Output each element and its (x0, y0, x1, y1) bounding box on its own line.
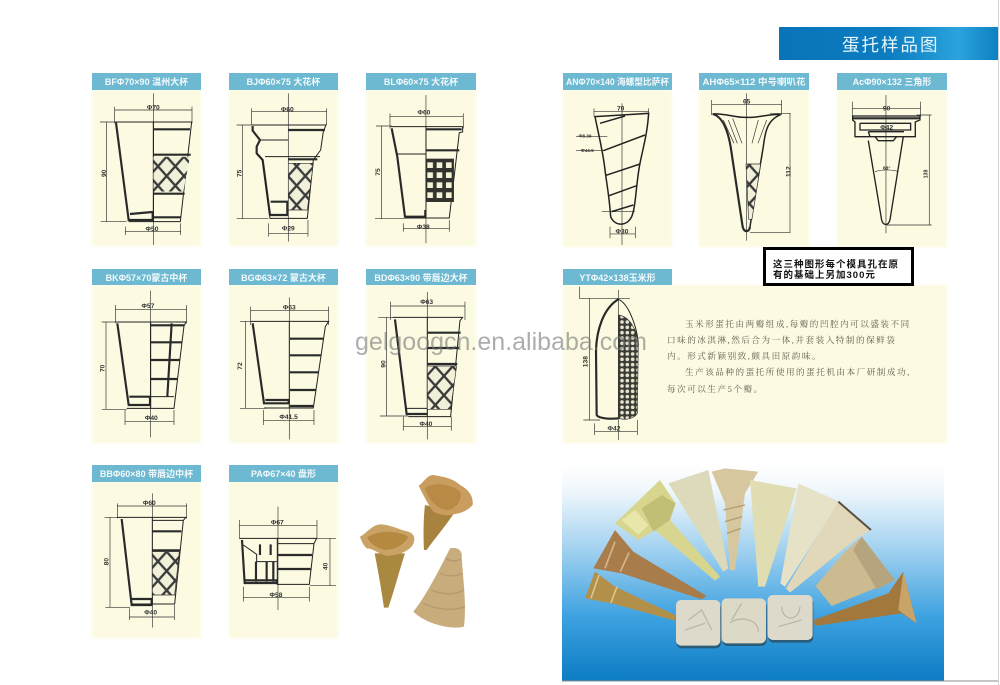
panel: BK: 70 (100, 364, 107, 372)
callout: surcharge note: 这三种图形每个模具孔在原 (773, 258, 899, 270)
panel: PA: 40 (322, 562, 329, 570)
panel: BK: BKΦ57×70蒙古中杯 (106, 272, 187, 283)
panel: PA: Φ67 (271, 519, 284, 526)
panel: Ac: 138 (923, 170, 929, 178)
panel: BL: Φ60 (418, 110, 431, 117)
panel: BB: Φ40 (144, 609, 157, 616)
panel: BK: Φ40 (145, 415, 158, 422)
panel: AH: 112 (786, 166, 793, 177)
panel: BD (366, 269, 476, 443)
diagram: corn-shaped cone (579, 287, 638, 440)
description text: 生产该品种的蛋托所使用的蛋托机由本厂研制成功, (685, 366, 911, 377)
panel: BJ (229, 73, 338, 246)
photo panel: cone samples (562, 465, 998, 682)
right edge line (998, 0, 999, 685)
panel: BF: BFΦ70×90 温州大杯 (105, 76, 188, 87)
panel: AN: Φ44.5 (581, 148, 594, 153)
panel: YT corn-shaped description: YTΦ42×138玉米形 (579, 272, 656, 283)
panel: BK (92, 269, 201, 443)
watermark: gelgoogcn.en.alibaba.com (355, 328, 647, 356)
title bar (779, 27, 998, 60)
panel: BF: Φ50 (146, 226, 159, 233)
panel: BD: Φ63 (420, 299, 433, 306)
panel: BJ: Φ29 (282, 226, 295, 233)
panel: AH: AHΦ65×112 中号喇叭花 (702, 76, 806, 87)
panel: BD: Φ40 (420, 421, 433, 428)
panel: BG: Φ41.5 (279, 414, 298, 421)
callout: surcharge note: 有的基础上另加300元 (773, 269, 876, 281)
panel: AN: Φ8.39 (579, 133, 592, 138)
panel: BB: Φ60 (143, 500, 156, 507)
panel: BB: BBΦ60×80 带唇边中杯 (100, 468, 193, 479)
description text: 内。形式新颖别致,颇具田原韵味。 (667, 350, 822, 361)
panel: BB: 80 (104, 558, 111, 565)
panel: PA: PAΦ67×40 盘形 (251, 468, 316, 479)
panel: BJ: Φ60 (281, 107, 294, 114)
panel: YT corn-shaped description (563, 269, 947, 443)
panel: Ac (837, 73, 947, 247)
panel: BL: Φ38 (417, 224, 430, 231)
panel: BF: 90 (101, 169, 108, 177)
panel: Ac: 68° (883, 165, 890, 171)
panel: BL (366, 73, 476, 246)
panel: BF (92, 73, 201, 246)
panel: PA: Φ58 (270, 592, 283, 599)
panel: PA (229, 465, 338, 638)
panel: BL: BLΦ60×75 大花杯 (384, 76, 458, 87)
panel: BL: 75 (375, 168, 382, 176)
panel: Ac: 90 (883, 106, 891, 113)
panel: BD: 90 (380, 360, 387, 368)
description text (667, 318, 911, 394)
photo: three wafer cones (360, 475, 473, 628)
panel: BB (92, 465, 201, 638)
description text: 口味的冰淇淋,然后合为一体,并套装入特制的保鲜袋 (667, 334, 896, 345)
panel: AN: Φ30 (616, 228, 629, 235)
description text: 每次可以生产5个瓣。 (667, 383, 764, 394)
panel: BK: Φ57 (142, 303, 155, 310)
panel: AN: 70 (617, 105, 625, 112)
panel: BF: Φ70 (147, 104, 160, 111)
panel: BG: BGΦ63×72 蒙古大杯 (241, 272, 326, 283)
panel: BD: BDΦ63×90 带唇边大杯 (374, 272, 468, 283)
panel: AH (699, 73, 809, 247)
panel: BJ: 75 (236, 169, 243, 177)
diagram: corn-shaped cone: 138 (582, 356, 589, 367)
panel: BG (229, 269, 338, 443)
panel: Ac: AcΦ90×132 三角形 (853, 76, 931, 87)
diagram: corn-shaped cone: Φ42 (608, 426, 621, 433)
panel: BJ: BJΦ60×75 大花杯 (247, 76, 320, 87)
panel: BG: Φ63 (283, 304, 296, 311)
panel: Ac: Φ42 (880, 124, 893, 131)
panel: AH: 65 (743, 98, 751, 105)
description text: 玉米形蛋托由两瓣组成,每瓣的凹腔内可以盛装不同 (685, 318, 911, 329)
title bar: 蛋托样品图 (842, 35, 940, 55)
panel: AN: ANΦ70×140 海螺型比萨杯 (566, 76, 669, 87)
callout: surcharge note (764, 248, 912, 284)
panel: AN (563, 73, 672, 247)
panel: BG: 72 (237, 362, 244, 370)
